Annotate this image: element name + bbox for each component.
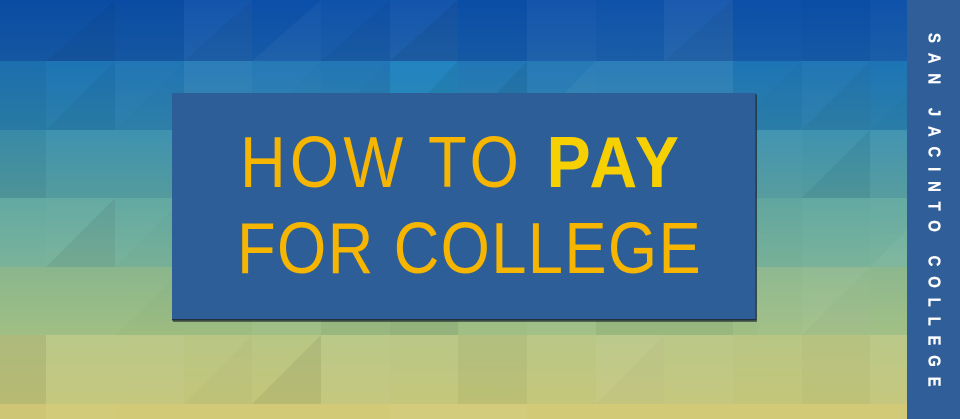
sidebar [907, 0, 960, 419]
title panel [172, 93, 757, 322]
title: for college: FOR COLLEGE [237, 209, 701, 289]
title: how to pay: HOW TO [240, 123, 519, 203]
title: how to pay: PAY [546, 121, 679, 203]
title: how to pay [240, 121, 679, 203]
sidebar text: college name: SAN JACINTO COLLEGE [924, 33, 944, 387]
